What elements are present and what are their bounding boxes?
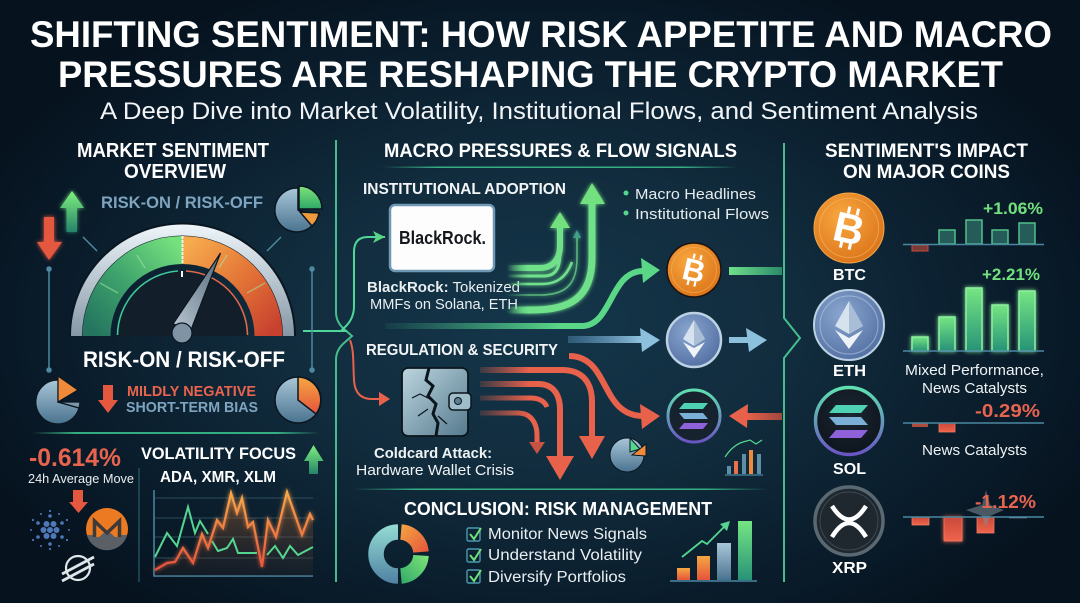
bars: XRP xyxy=(903,490,1044,541)
list: macro bullets: Macro Headlines xyxy=(635,186,756,203)
subheading: institutional adoption: INSTITUTIONAL ADOPTION xyxy=(363,181,566,198)
coin: ETH xyxy=(814,290,884,360)
bias text xyxy=(126,383,258,416)
heading: sentiment impact xyxy=(825,141,1028,183)
donut chart xyxy=(376,532,421,576)
panel: sentiment impact on major coins xyxy=(814,141,1044,577)
icon: pie bottom left xyxy=(36,376,80,424)
decorative ticks and rails xyxy=(47,237,314,372)
heading: volatility focus: VOLATILITY FOCUS xyxy=(141,444,296,463)
title: SHIFTING SENTIMENT: HOW RISK APPETITE AND MACRO xyxy=(30,14,1052,55)
coin: BTC: B xyxy=(829,202,869,255)
checklist: Understand Volatility xyxy=(488,547,642,564)
bars: BTC xyxy=(903,199,1044,251)
divider xyxy=(353,488,768,490)
icon: cracked wallet xyxy=(402,368,471,436)
arrow: red flow into SOL from right xyxy=(729,404,782,428)
bars: XRP: -1.12% xyxy=(975,492,1036,512)
list: macro bullets: Institutional Flows xyxy=(635,206,769,223)
heading: macro pressures: MACRO PRESSURES & FLOW SIGNALS xyxy=(384,141,737,162)
subheading: regulation and security: REGULATION & SECURITY xyxy=(366,342,559,359)
text: mixed performance xyxy=(905,363,1044,397)
icon: red down arrow bias xyxy=(98,385,118,413)
gauge label: RISK-ON / RISK-OFF xyxy=(83,347,285,372)
label: BTC: BTC xyxy=(833,267,866,284)
bar: BTC flow out xyxy=(729,267,782,275)
panel dividers: braided connectors xyxy=(303,140,800,582)
arrow: green flow to BTC xyxy=(385,258,660,326)
logo card: blackrock: BlackRock. xyxy=(399,228,486,248)
checklist xyxy=(467,526,647,586)
bars: ETH: +2.21% xyxy=(982,265,1040,284)
text: mixed performance: News Catalysts xyxy=(922,381,1027,397)
bars: ETH xyxy=(903,265,1044,351)
divider xyxy=(32,432,320,434)
text: news catalysts: News Catalysts xyxy=(922,443,1027,459)
icon: red down arrow xyxy=(37,217,62,260)
heading: conclusion: CONCLUSION: RISK MANAGEMENT xyxy=(404,499,712,519)
stat: 24h average move xyxy=(28,444,134,486)
panel: macro pressures and flow signals xyxy=(350,141,782,586)
bars: BTC: +1.06% xyxy=(983,199,1043,218)
bars: SOL xyxy=(903,401,1044,432)
icon: small bitcoin coin xyxy=(667,243,721,297)
text: coldcard caption: Hardware Wallet Crisis xyxy=(356,463,514,479)
bias text: MILDLY NEGATIVE xyxy=(127,383,256,400)
panel: market sentiment overview xyxy=(28,140,324,582)
coin: SOL xyxy=(816,388,882,454)
stat: 24h average move: 24h Average Move xyxy=(28,472,134,486)
icon: stellar xyxy=(62,556,94,581)
gauge needle xyxy=(172,253,220,343)
arrow: red connector to wallet xyxy=(350,340,390,406)
checklist: Monitor News Signals xyxy=(488,526,647,543)
arrow: blue flow out of ETH xyxy=(729,328,767,352)
coin: BTC xyxy=(814,193,884,263)
heading: market sentiment overview: OVERVIEW xyxy=(124,161,226,183)
arrows: regulation red flows xyxy=(480,370,605,480)
stat: 24h average move: -0.614% xyxy=(29,444,121,472)
icon: pie bottom right xyxy=(275,377,321,423)
icon: green up arrow xyxy=(60,191,84,232)
text: blackrock caption: BlackRock: Tokenized xyxy=(367,280,520,296)
icon: small bitcoin coin: B xyxy=(679,251,709,290)
icon: red down arrow xyxy=(69,490,88,513)
icon: small ethereum coin xyxy=(667,313,721,367)
heading: market sentiment overview xyxy=(77,140,269,183)
icon: green up arrow volatility xyxy=(304,445,324,474)
text: blackrock caption: MMFs on Solana, ETH xyxy=(370,297,518,313)
icon: small pie xyxy=(610,438,646,472)
label: risk-on risk-off: RISK-ON / RISK-OFF xyxy=(101,193,263,212)
list: macro bullets xyxy=(624,186,769,223)
title: PRESSURES ARE RESHAPING THE CRYPTO MARKET xyxy=(58,54,1003,95)
bars: SOL: -0.29% xyxy=(975,401,1040,421)
label: SOL: SOL xyxy=(833,461,866,478)
subtitle: A Deep Dive into Market Volatility, Institutional Flows, and Sentiment Analysis xyxy=(100,98,978,125)
icon: monero xyxy=(86,508,128,550)
icon: mini bar chart xyxy=(725,440,763,475)
icon: pie top right xyxy=(275,186,322,232)
heading: sentiment impact: ON MAJOR COINS xyxy=(843,162,1010,183)
line chart: volatility xyxy=(139,468,313,582)
divider xyxy=(383,166,737,168)
icon: cardano xyxy=(30,510,70,550)
arrow: blue flow to ETH xyxy=(568,328,660,352)
text: blackrock caption xyxy=(367,280,520,313)
gauge xyxy=(76,230,288,343)
label: ETH: ETH xyxy=(833,363,866,380)
subheading: tickers: ADA, XMR, XLM xyxy=(160,469,276,486)
bias text: SHORT-TERM BIAS xyxy=(126,399,258,416)
logo card: blackrock xyxy=(390,205,494,271)
label: XRP: XRP xyxy=(832,560,867,577)
bar chart: conclusion xyxy=(670,521,757,581)
arrow: red flow to SOL xyxy=(569,356,660,429)
text: mixed performance: Mixed Performance, xyxy=(905,363,1044,379)
heading: sentiment impact: SENTIMENT'S IMPACT xyxy=(825,141,1028,162)
coin: XRP xyxy=(815,487,883,555)
text: coldcard caption xyxy=(356,446,514,479)
arrows: institutional green flows xyxy=(507,183,605,310)
text: coldcard caption: Coldcard Attack: xyxy=(374,446,492,462)
icon: small solana coin xyxy=(668,390,720,442)
title xyxy=(30,14,1052,95)
heading: market sentiment overview: MARKET SENTIMENT xyxy=(77,140,269,162)
checklist: Diversify Portfolios xyxy=(488,569,626,586)
